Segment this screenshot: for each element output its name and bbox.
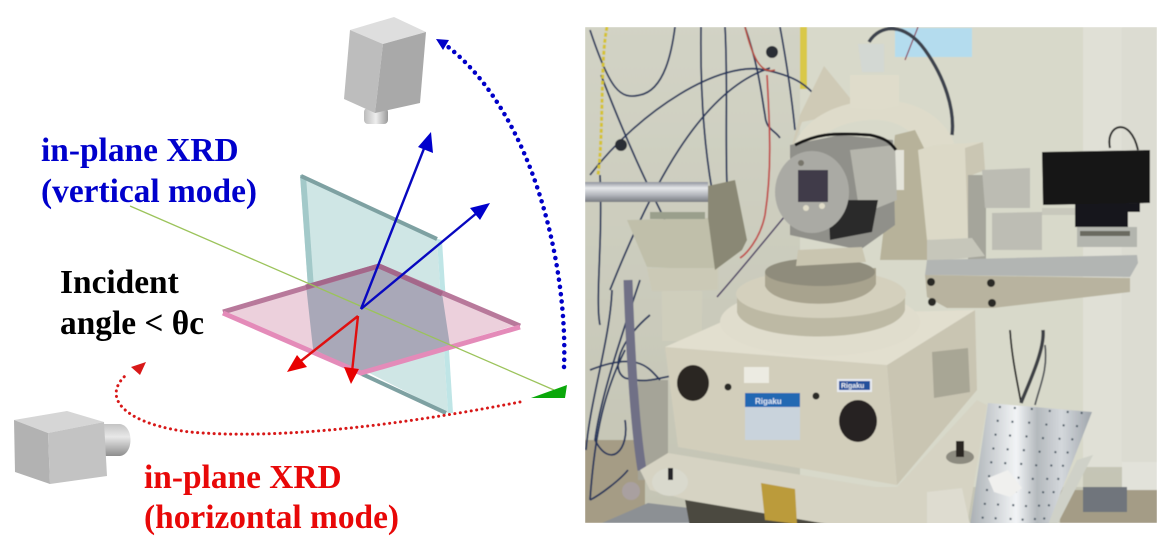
base cabinet: Rigaku: [755, 397, 782, 406]
label: incident angle: angle < θc: [60, 305, 204, 342]
cables: [586, 27, 1138, 500]
X-ray tube and left optics: [585, 180, 748, 271]
icon: vertical sample plane: [300, 175, 453, 413]
label: incident angle: Incident: [60, 264, 179, 301]
detector arm: [918, 142, 1150, 308]
base cabinet: Rigaku: [841, 383, 864, 390]
blue diffracted arrows: [361, 132, 490, 309]
label: horizontal mode: in-plane XRD: [144, 459, 342, 496]
rotary sample stage: [720, 246, 906, 337]
icon: horizontal sample plane: [223, 264, 520, 373]
icon: goniometer ring: [793, 45, 928, 260]
label: vertical mode: in-plane XRD: [41, 132, 239, 169]
label: horizontal mode: [144, 459, 399, 536]
red dotted motion arrow: [116, 362, 520, 434]
label: vertical mode: [41, 132, 257, 210]
icon: left detector: [14, 411, 130, 484]
panel: geometry diagram: [14, 17, 567, 536]
incident beam line: [130, 206, 554, 390]
icon: top detector: [344, 17, 426, 124]
blue dotted motion arrow: [436, 39, 564, 367]
steel breadboard table: [602, 400, 1093, 527]
label: vertical mode: (vertical mode): [41, 173, 257, 210]
icon: green x-ray source wedge: [531, 385, 567, 398]
red refracted arrows: [287, 316, 359, 384]
goniometer head: [775, 134, 897, 250]
base cabinet: [665, 310, 977, 485]
photo: Rigaku diffractometer: [585, 27, 1157, 527]
label: incident angle: [60, 264, 204, 342]
label: horizontal mode: (horizontal mode): [144, 499, 399, 536]
